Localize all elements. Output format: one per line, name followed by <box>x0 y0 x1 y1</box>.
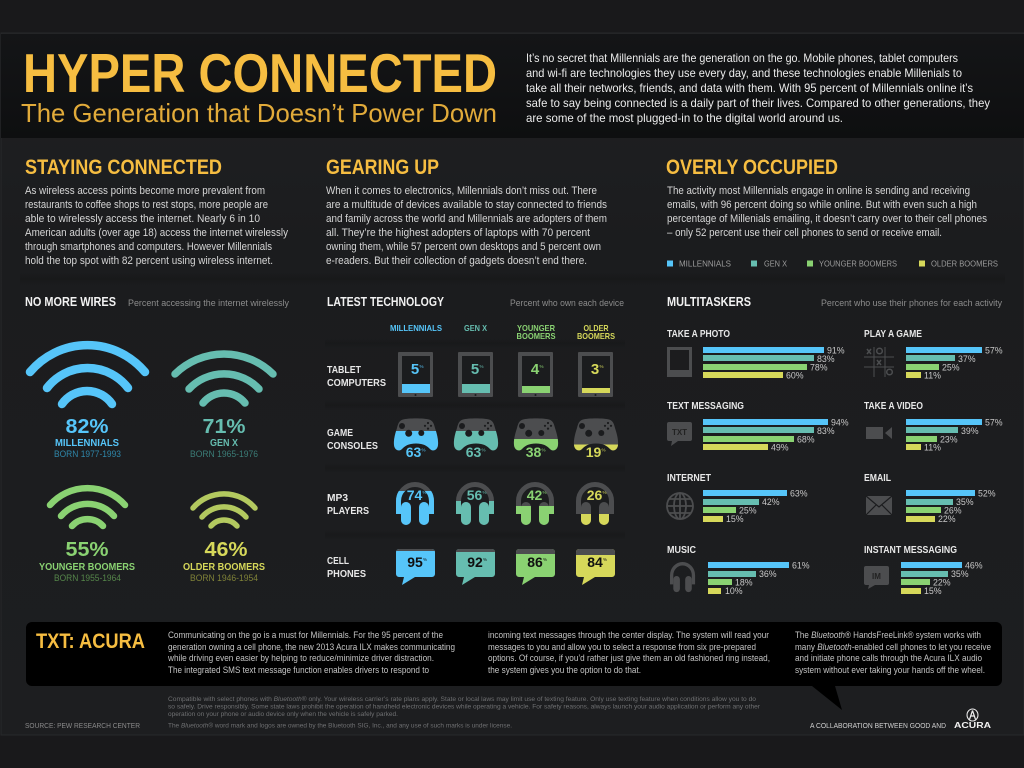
icon: txt bubble: TXT <box>672 428 687 437</box>
activity: take a photo: TAKE A PHOTO <box>667 328 730 340</box>
bubble: millennials: 95 <box>407 554 423 570</box>
controller: gen x: 63 <box>466 444 481 460</box>
activity: text messaging <box>667 400 849 452</box>
wifi: millennials: MILLENNIALS <box>55 437 119 449</box>
column headers: GEN X <box>464 323 487 333</box>
body text: overly occupied <box>667 185 987 239</box>
wifi: gen x: GEN X <box>210 437 238 449</box>
row label: mp3: MP3 <box>327 492 348 504</box>
tablet: younger boomers: 4 <box>531 361 540 378</box>
legend: MILLENNIALS <box>679 258 731 268</box>
bubble: younger boomers: 86 <box>527 554 543 570</box>
bars: play a game: 37% <box>958 354 976 364</box>
tablet: millennials: % <box>420 364 424 369</box>
callout column 1: generation owning a cell phone, the new 2013 Acura ILX makes communicating <box>168 642 455 653</box>
controller: older boomers: % <box>602 448 606 452</box>
icon: txt bubble <box>667 422 692 446</box>
title: HYPER CONNECTED <box>23 42 497 104</box>
tablet: gen x: 5 <box>471 361 479 378</box>
heading: overly occupied: OVERLY OCCUPIED <box>666 156 838 179</box>
body text: staying connected <box>25 185 288 267</box>
fine print: Compatible with select phones with Bluetooth® only. Your wireless carrier’s rate plans apply. State or local laws may limit use of texting feature. Only use texting feature when conditions allow you to do <box>168 695 756 703</box>
row label: tablets: COMPUTERS <box>327 377 386 389</box>
body text: staying connected: hold the top spot with 82 percent using wireless internet. <box>25 255 273 267</box>
bars: music: 10% <box>725 586 743 596</box>
column headers: YOUNGER <box>517 323 555 333</box>
bars: take a photo: 91% <box>827 346 845 356</box>
activity: instant messaging: INSTANT MESSAGING <box>864 544 957 556</box>
controller: gen x: % <box>482 448 486 452</box>
controller: gen x <box>454 418 498 457</box>
row label: phones: CELL <box>327 555 349 567</box>
section: staying connected <box>25 156 288 267</box>
bars: take a photo: 60% <box>786 370 804 380</box>
bars: email <box>906 488 996 524</box>
wifi: younger boomers: 55% <box>66 539 109 561</box>
bars: take a video <box>906 418 1003 452</box>
icon: globe <box>667 493 693 519</box>
section: overly occupied <box>666 156 998 268</box>
headphones: millennials: % <box>422 490 427 495</box>
row label: phones: PHONES <box>327 568 366 580</box>
icon: video camera <box>866 427 892 439</box>
row: cell phones <box>327 549 615 585</box>
tablet: younger boomers: % <box>540 364 544 369</box>
row label: mp3: PLAYERS <box>327 505 369 517</box>
acura logo <box>954 709 991 730</box>
callout column 2 <box>488 630 770 676</box>
tablet: older boomers: 3 <box>591 361 599 378</box>
body text: overly occupied: emails, with 96 percent doing so while online. But with even such a high <box>667 199 977 211</box>
column headers <box>390 323 615 341</box>
headphones: older boomers <box>578 484 612 525</box>
wifi: younger boomers <box>39 488 135 583</box>
bars: music: 61% <box>792 560 810 570</box>
fine print: operation on your phone or audio device only when the vehicle is safely parked. <box>168 711 398 718</box>
row label: consoles <box>327 427 378 452</box>
body text: staying connected: restaurants to coffee shops to rest stops, more people are <box>25 199 268 211</box>
headphones: older boomers: 26 <box>587 487 602 503</box>
panel: latest technology <box>325 295 625 585</box>
bars: internet <box>703 488 808 524</box>
wifi: older boomers: 46% <box>204 539 248 561</box>
body text: staying connected: able to wirelessly access the internet. Nearly 6 in 10 <box>25 213 260 225</box>
panel: no more wires <box>25 295 289 583</box>
body text: overly occupied: percentage of Millenials emailing, it doesn’t carry over to their cell phones <box>667 213 987 225</box>
intro text: It’s no secret that Millennials are the generation on the go. Mobile phones, tablet computers <box>526 51 958 65</box>
heading: no more wires: NO MORE WIRES <box>25 295 116 309</box>
bars: internet: 63% <box>790 488 808 498</box>
bars: take a video: 11% <box>924 442 941 452</box>
activity: music <box>667 544 810 596</box>
bubble: millennials <box>396 549 435 585</box>
bubble: younger boomers <box>516 549 555 585</box>
callout column 3: The Bluetooth® HandsFreeLink® system works with <box>795 630 981 641</box>
controller: older boomers: 19 <box>586 444 601 460</box>
tablet: younger boomers <box>518 352 553 397</box>
legend: OLDER BOOMERS <box>931 258 998 268</box>
callout column 2: options. Of course, if you’d rather just give them an old fashioned ring instead, <box>488 653 770 664</box>
headphones: gen x: 56 <box>467 487 482 503</box>
tablet: millennials <box>398 352 433 397</box>
body text: gearing up: all. They’re the highest adopters of laptops with 70 percent <box>326 227 590 239</box>
bars: take a photo <box>703 346 845 380</box>
bars: instant messaging: 15% <box>924 586 942 596</box>
callout column 1: while driving even easier by helping to reduce/minimize driver distraction. <box>167 653 434 664</box>
body text: staying connected: American adults (over age 18) access the internet wirelessly <box>25 227 288 239</box>
bars: play a game <box>906 346 1003 380</box>
bars: music: 36% <box>759 569 777 579</box>
bars: text messaging <box>703 418 849 452</box>
headphones: younger boomers: 42 <box>527 487 542 503</box>
activity: email: EMAIL <box>864 472 891 484</box>
tablet: gen x: % <box>480 364 484 369</box>
bubble: millennials: % <box>423 557 427 562</box>
headphones: younger boomers: % <box>542 490 547 495</box>
caption: latest technology: Percent who own each device <box>510 298 624 308</box>
activity: play a game <box>864 328 1003 380</box>
icon: envelope <box>866 496 892 515</box>
row: mp3 players <box>327 484 612 525</box>
caption: no more wires: Percent accessing the internet wirelessly <box>128 298 289 308</box>
callout heading: TXT: ACURA <box>36 630 145 653</box>
bars: internet: 15% <box>726 514 744 524</box>
bars: play a game: 25% <box>942 362 960 372</box>
tablet: older boomers: % <box>600 364 604 369</box>
bars: take a video: 57% <box>985 418 1003 428</box>
activity: play a game: PLAY A GAME <box>864 328 922 340</box>
column headers: MILLENNIALS <box>390 323 442 333</box>
bars: instant messaging: 22% <box>933 578 951 588</box>
body text: gearing up: When it comes to electronics, Millennials don’t miss out. There <box>326 185 597 197</box>
legend: YOUNGER BOOMERS <box>819 258 897 268</box>
controller: younger boomers <box>514 418 558 457</box>
header <box>1 34 1024 138</box>
callout column 2: incoming text messages through the center display. The system will read your <box>488 630 769 641</box>
heading: gearing up: GEARING UP <box>326 156 439 179</box>
icon: im bubble: IM <box>872 572 881 581</box>
tablet: older boomers <box>578 352 613 397</box>
callout column 2: messages to you and allow you to select a response from six pre-prepared <box>488 642 756 653</box>
icon: tic tac toe <box>864 347 894 377</box>
headphones: millennials: 74 <box>407 487 422 503</box>
body text: overly occupied: The activity most Millennials engage in online is sending and receiving <box>667 185 970 197</box>
row: game consoles <box>327 418 620 460</box>
controller: older boomers <box>574 418 618 457</box>
body text: gearing up: owning them, while 57 percent own desktops and 5 percent own <box>326 241 601 253</box>
bubble: younger boomers: % <box>543 557 547 562</box>
heading: multitaskers: MULTITASKERS <box>667 295 751 309</box>
headphones: gen x: % <box>482 490 487 495</box>
section: gearing up <box>326 156 607 267</box>
bars: internet: 25% <box>739 506 757 516</box>
body text: staying connected: through smartphones and computers. However Millennials <box>25 241 272 253</box>
body text: gearing up: are a multitude of devices available to stay connected to friends <box>326 199 607 211</box>
activity: text messaging: TEXT MESSAGING <box>667 400 744 412</box>
legend: GEN X <box>764 258 787 268</box>
acura logo: ACURA <box>954 721 991 730</box>
source: SOURCE: PEW RESEARCH CENTER <box>25 723 140 730</box>
wifi: gen x: BORN 1965-1976 <box>190 449 258 459</box>
activity: instant messaging <box>864 544 983 596</box>
activity: email <box>864 472 996 524</box>
bars: play a game: 11% <box>924 370 941 380</box>
controller: millennials <box>394 418 438 457</box>
collaboration credit: A COLLABORATION BETWEEN GOOD AND <box>810 723 946 730</box>
bars: text messaging: 68% <box>797 434 815 444</box>
callout: txt acura <box>26 622 1002 710</box>
bars: instant messaging: 46% <box>965 560 983 570</box>
bars: take a video: 39% <box>961 426 979 436</box>
column headers: BOOMERS <box>577 331 615 341</box>
fine print <box>168 695 761 730</box>
bubble: gen x: 92 <box>467 554 483 570</box>
bars: play a game: 57% <box>985 346 1003 356</box>
subtitle: The Generation that Doesn’t Power Down <box>21 98 497 128</box>
row label: consoles: CONSOLES <box>327 440 378 452</box>
wifi: younger boomers: YOUNGER BOOMERS <box>39 561 135 573</box>
intro text: take all their networks, friends, and data with them. With 95 percent of Millennials online it’s <box>526 81 973 95</box>
tablet: millennials: 5 <box>411 361 419 378</box>
bubble: older boomers: 84 <box>587 554 603 570</box>
bars: email: 26% <box>944 506 962 516</box>
bars: text messaging: 83% <box>817 426 835 436</box>
callout column 3: system without ever taking your hands off the wheel. <box>795 665 985 676</box>
bars: instant messaging: 35% <box>951 569 969 579</box>
body text: gearing up: e-readers. But their collection of gadgets doesn’t end there. <box>326 255 587 267</box>
body text: gearing up <box>326 185 607 267</box>
caption: multitaskers: Percent who use their phones for each activity <box>821 298 1002 308</box>
heading: latest technology: LATEST TECHNOLOGY <box>327 295 445 309</box>
bars: text messaging: 94% <box>831 418 849 428</box>
wifi: millennials <box>30 345 145 459</box>
row label: mp3 <box>327 492 369 517</box>
bars: email: 52% <box>978 488 996 498</box>
row: tablet computers <box>327 352 613 397</box>
callout column 3: and initiate phone calls through the Acura ILX audio <box>795 653 982 664</box>
activity: take a video <box>864 400 1003 452</box>
bubble: gen x: % <box>483 557 487 562</box>
controller: millennials: % <box>422 448 426 452</box>
headphones: older boomers: % <box>602 490 607 495</box>
bars: email: 22% <box>938 514 956 524</box>
tablet: gen x <box>458 352 493 397</box>
row label: tablets: TABLET <box>327 364 361 376</box>
headphones: younger boomers <box>518 484 552 525</box>
wifi: older boomers <box>183 494 265 583</box>
heading: staying connected: STAYING CONNECTED <box>25 156 222 179</box>
activity: take a photo <box>667 328 845 380</box>
row label: phones <box>327 555 366 580</box>
intro text <box>526 51 990 125</box>
footer <box>25 695 991 730</box>
wifi: millennials: 82% <box>66 416 109 438</box>
icon: headphones <box>672 564 693 592</box>
wifi: gen x <box>175 354 273 459</box>
body text: gearing up: and family across the world and Millennials are adopters of them <box>326 213 607 225</box>
bars: email: 35% <box>956 497 974 507</box>
column headers: BOOMERS <box>516 331 556 341</box>
bars: internet: 42% <box>762 497 780 507</box>
bars: take a video: 23% <box>940 434 958 444</box>
wifi: older boomers: BORN 1946-1954 <box>190 573 258 583</box>
bubble: older boomers <box>576 549 615 585</box>
intro text: are some of the most plugged-in to the digital world around us. <box>526 111 843 125</box>
fine print: The Bluetooth® word mark and logos are owned by the Bluetooth SIG, Inc., and any use of such marks is under license. <box>168 722 512 730</box>
panel: multitaskers <box>667 295 1003 596</box>
wifi: younger boomers: BORN 1955-1964 <box>54 573 121 583</box>
callout column 3 <box>795 630 991 676</box>
controller: younger boomers: 38 <box>526 444 541 460</box>
bubble: older boomers: % <box>603 557 607 562</box>
icon: photo <box>667 347 692 377</box>
bubble: gen x <box>456 549 495 585</box>
callout column 3: many Bluetooth-enabled cell phones to let you receive <box>795 642 991 653</box>
headphones: millennials <box>398 484 432 525</box>
wifi: gen x: 71% <box>202 416 246 438</box>
wifi: millennials: BORN 1977-1993 <box>54 449 121 459</box>
bars: take a photo: 83% <box>817 354 835 364</box>
bars: take a photo: 78% <box>810 362 828 372</box>
body text: staying connected: As wireless access points become more prevalent from <box>25 185 265 197</box>
activity: take a video: TAKE A VIDEO <box>864 400 923 412</box>
body text: overly occupied: – only 52 percent use their cell phones to send or receive email. <box>667 227 942 239</box>
activity: internet <box>667 472 808 524</box>
intro text: safe to say being connected is a daily part of their lives. Compared to other generations, they <box>526 96 990 110</box>
fine print: so safely. Drive responsibly. Some state laws prohibit the operation of handheld electronic devices while operating a vehicle. For safety reasons, always launch your audio application or perform any other <box>168 704 761 710</box>
legend <box>667 258 998 268</box>
callout column 1: Communicating on the go is a must for Millennials. For the 95 percent of the <box>168 630 443 641</box>
callout column 2: the system gives you the option to do that. <box>488 665 641 676</box>
headphones: gen x <box>458 484 492 525</box>
controller: millennials: 63 <box>406 444 421 460</box>
bars: music: 18% <box>735 578 753 588</box>
column headers: OLDER <box>584 323 608 333</box>
callout column 1: The integrated SMS text message function enables drivers to respond to <box>168 665 429 676</box>
bars: text messaging: 49% <box>771 442 789 452</box>
callout column 1 <box>167 630 455 676</box>
activity: music: MUSIC <box>667 544 696 556</box>
intro text: and wi-fi are technologies they use every day, and these technologies enable Millenials to <box>526 66 962 80</box>
wifi: older boomers: OLDER BOOMERS <box>183 561 265 573</box>
row label: consoles: GAME <box>327 427 353 439</box>
controller: younger boomers: % <box>542 448 546 452</box>
row label: tablets <box>327 364 386 389</box>
bars: instant messaging <box>901 560 983 596</box>
bars: music <box>708 560 810 596</box>
activity: internet: INTERNET <box>667 472 711 484</box>
